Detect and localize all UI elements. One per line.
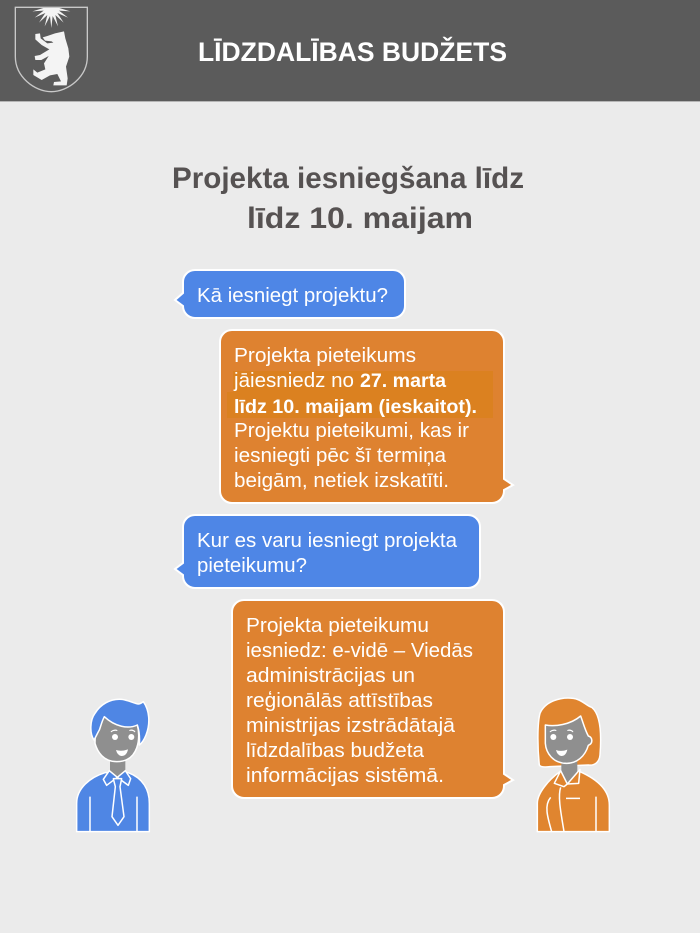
icon: woman avatar bbox=[537, 698, 609, 832]
answer bubble 2: informācijas sistēmā. bbox=[246, 764, 444, 787]
coat of arms bbox=[15, 7, 87, 92]
answer text 1: līdz 10. maijam (ieskaitot). bbox=[234, 396, 477, 418]
answer text 1: Projekta pieteikums bbox=[234, 344, 416, 367]
answer bubble 2: ministrijas izstrādātajā bbox=[246, 714, 456, 737]
answer text 1: beigām, netiek izskatīti. bbox=[234, 469, 449, 492]
answer bubble 1 bbox=[220, 330, 513, 503]
answer text 1: jāiesniedz no bbox=[233, 369, 354, 392]
answer bubble 2 bbox=[232, 600, 513, 798]
heading: līdz 10. maijam bbox=[247, 202, 473, 235]
answer bubble 2: administrācijas un bbox=[246, 664, 415, 687]
answer text 1 bbox=[233, 344, 477, 492]
answer text 1: 27. marta bbox=[360, 370, 446, 392]
answer text 1: Projektu pieteikumi, kas ir bbox=[234, 419, 469, 442]
face details bbox=[550, 730, 573, 756]
question bubble 2: Kur es varu iesniegt projekta bbox=[197, 529, 458, 552]
question bubble 2: pieteikumu? bbox=[197, 554, 307, 577]
header title: LĪDZDALĪBAS BUDŽETS bbox=[198, 36, 507, 67]
answer bubble 2: līdzdalības budžeta bbox=[246, 739, 425, 762]
face details bbox=[111, 730, 135, 756]
answer bubble 2: iesniedz: e-vidē – Viedās bbox=[246, 639, 473, 662]
answer bubble 2: Projekta pieteikumu bbox=[246, 614, 429, 637]
highlighted date background bbox=[227, 371, 493, 418]
question bubble 1 bbox=[175, 270, 405, 318]
answer bubble 2: reģionālās attīstības bbox=[246, 689, 433, 712]
question bubble 1: Kā iesniegt projektu? bbox=[197, 284, 388, 307]
heading bbox=[172, 162, 524, 235]
question bubble 2 bbox=[175, 515, 480, 588]
answer text 1: iesniegti pēc šī termiņa bbox=[234, 444, 447, 467]
icon: man avatar bbox=[77, 699, 149, 832]
header bar bbox=[0, 0, 700, 102]
heading: Projekta iesniegšana līdz bbox=[172, 162, 524, 195]
